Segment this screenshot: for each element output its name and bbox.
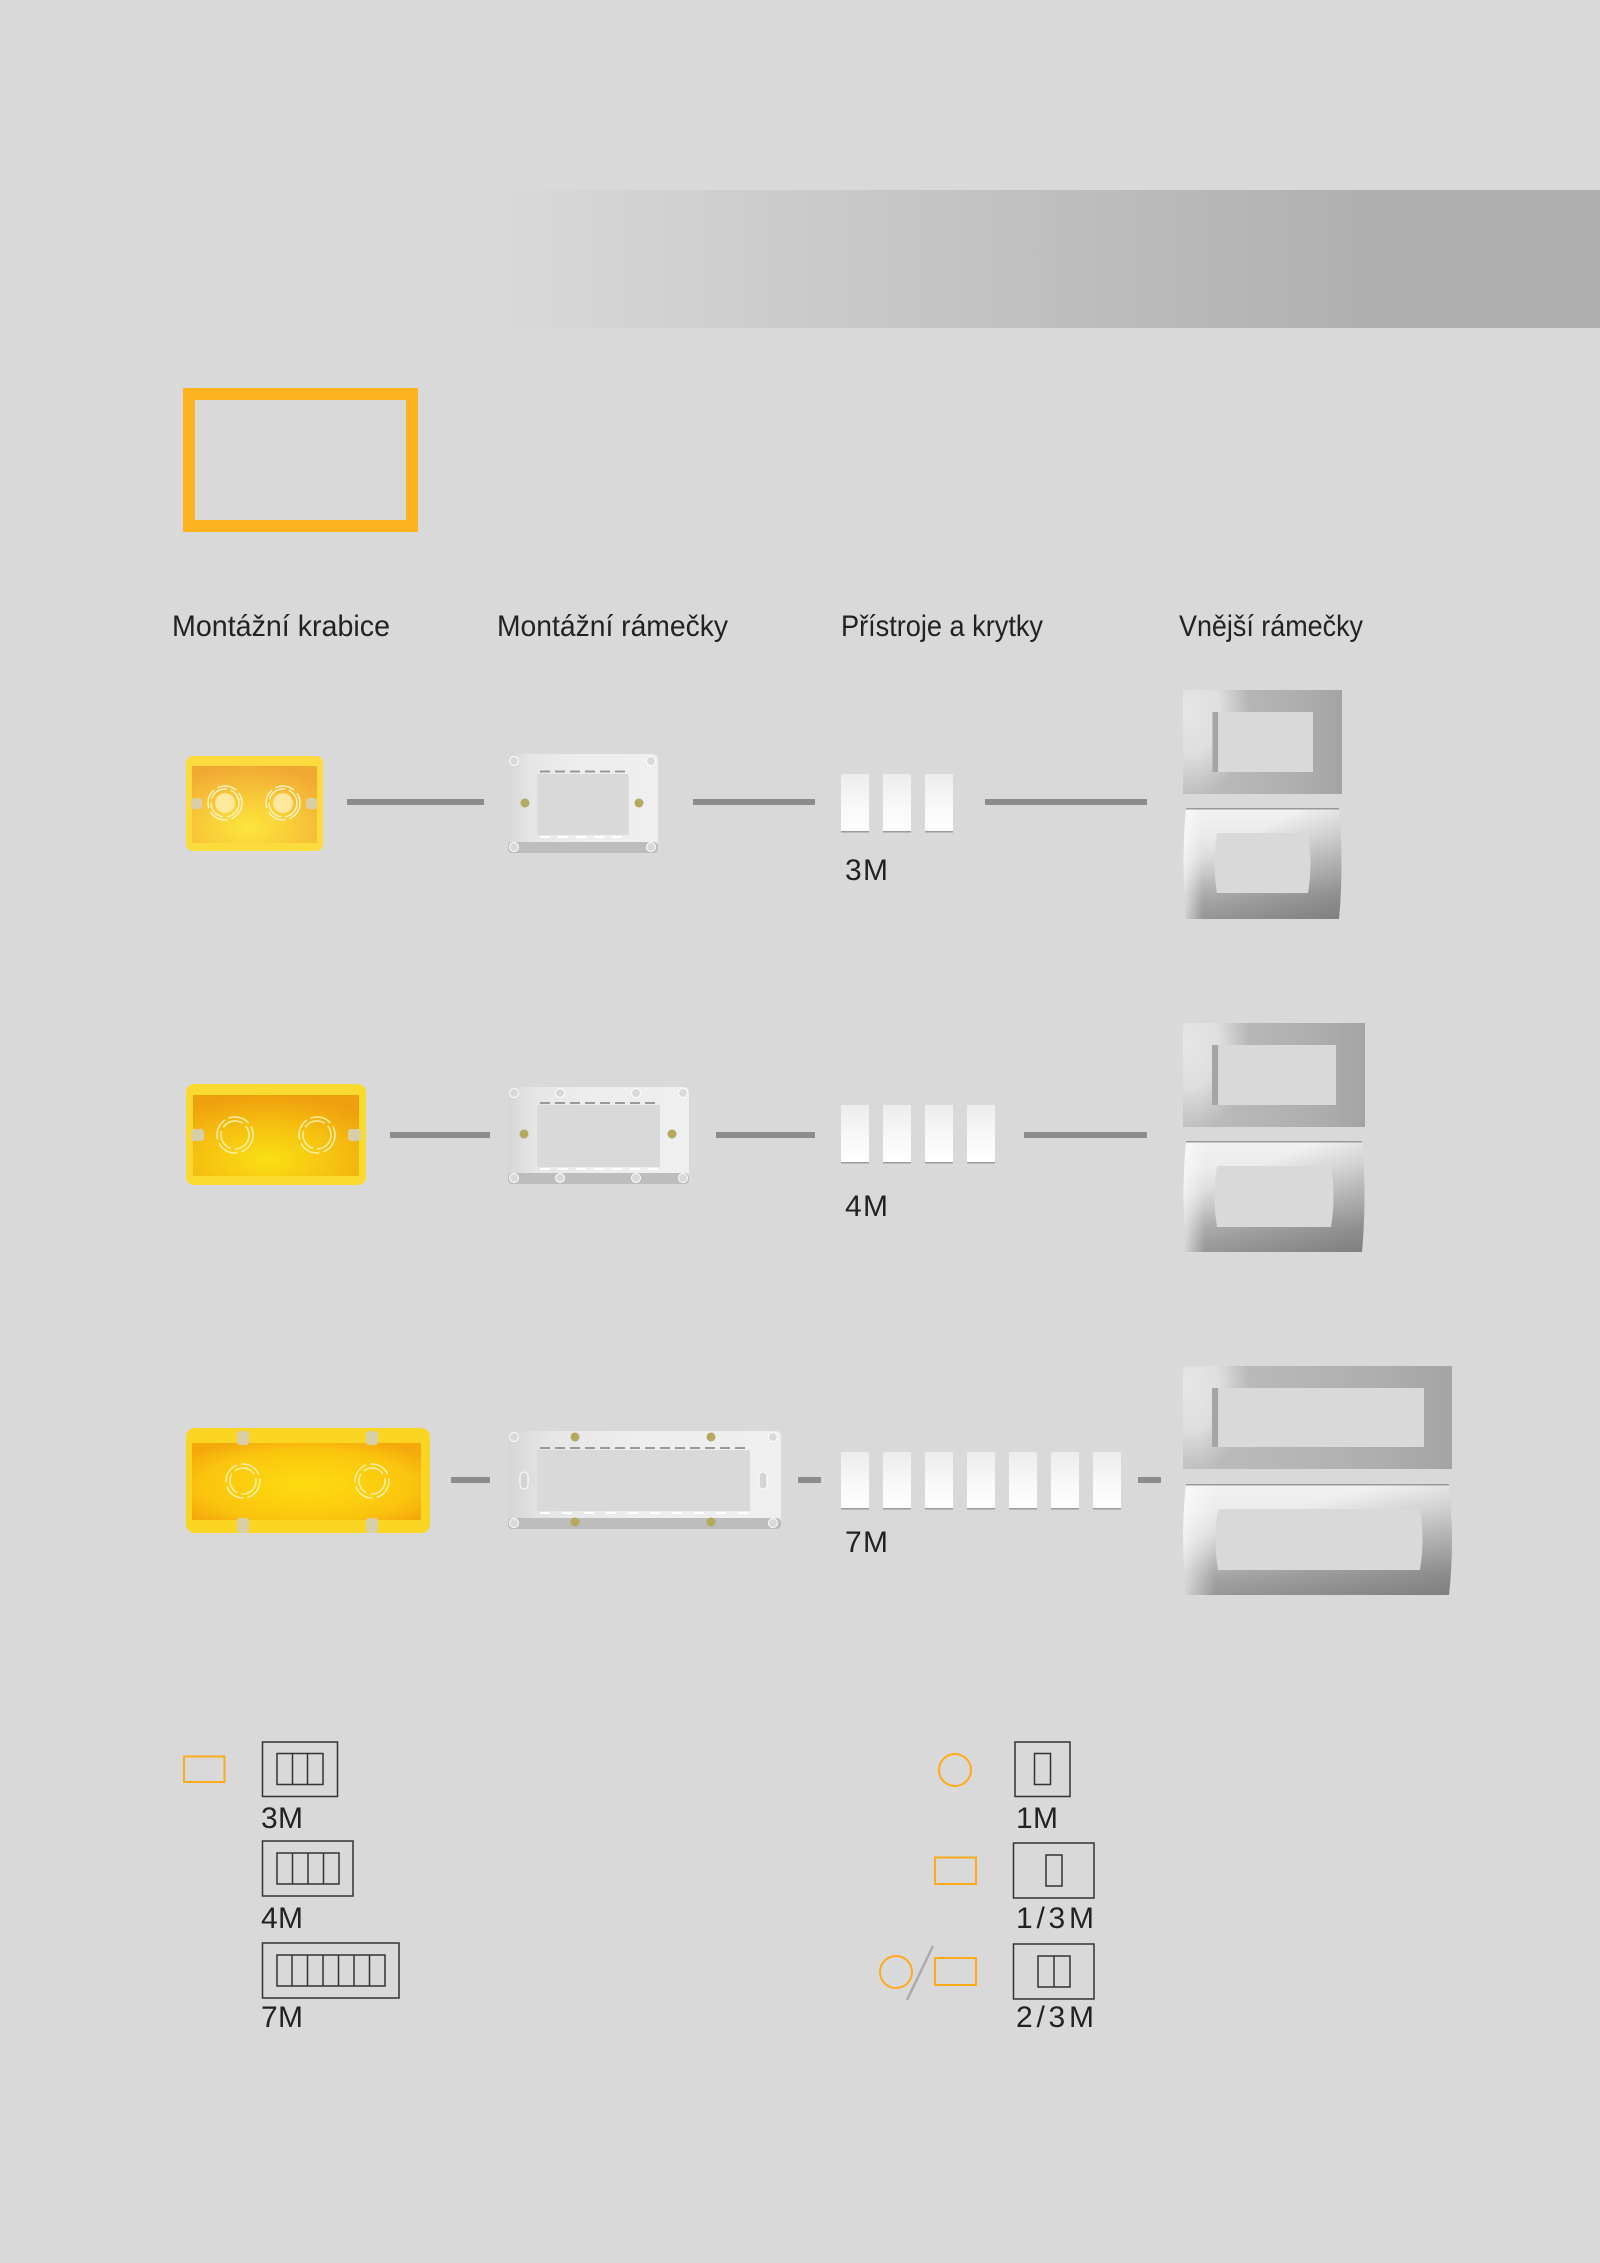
connector line	[1138, 1477, 1161, 1483]
modules 4M	[841, 1105, 995, 1164]
square cover plate 4M	[1183, 1023, 1365, 1127]
square cover plate 7M	[1183, 1366, 1452, 1469]
panel: 7M row	[186, 1366, 1452, 1595]
column headings	[172, 610, 1363, 643]
diagram 2/3M	[1014, 1944, 1094, 1999]
connector line	[798, 1477, 821, 1483]
heading: Přístroje a krytky: Přístroje a krytky	[841, 610, 1043, 643]
label 3M: 3M	[845, 854, 888, 887]
label 4M: 4M	[261, 1902, 303, 1935]
yellow mounting box 7M	[186, 1428, 430, 1533]
curved cover plate 3M	[1184, 808, 1342, 919]
label 4M: 4M	[845, 1190, 888, 1223]
diagram 4M	[262, 1841, 353, 1896]
square cover plate 3M	[1183, 690, 1342, 794]
label 7M: 7M	[261, 2001, 303, 2034]
connector line	[693, 799, 815, 805]
legend: rectangular box formats	[184, 1742, 399, 2034]
orange title frame	[189, 394, 412, 526]
connector line	[1024, 1132, 1147, 1138]
modules 3M	[841, 774, 953, 832]
diagram 3M	[262, 1742, 338, 1796]
modules 7M	[841, 1452, 1121, 1510]
yellow mounting box 3M	[186, 756, 323, 851]
heading: Montážní rámečky: Montážní rámečky	[497, 610, 728, 643]
heading: Vnější rámečky: Vnější rámečky	[1179, 610, 1363, 643]
connector line	[985, 799, 1147, 805]
mounting frame 7M	[508, 1431, 781, 1529]
label 2/3M: 2/3M	[1016, 2001, 1094, 2034]
connector line	[451, 1477, 490, 1483]
yellow mounting box 4M	[186, 1084, 366, 1185]
curved cover plate 4M	[1184, 1141, 1364, 1252]
label 3M: 3M	[261, 1802, 303, 1835]
heading: Montážní krabice: Montážní krabice	[172, 610, 390, 643]
icon: orange rectangle	[184, 1756, 224, 1782]
panel: 3M row	[186, 690, 1342, 919]
header gradient band	[503, 190, 1600, 328]
connector line	[716, 1132, 815, 1138]
panel: 4M row	[186, 1023, 1365, 1252]
icon: orange circle	[939, 1754, 971, 1786]
label 1M: 1M	[1016, 1802, 1058, 1835]
diagram 1M	[1015, 1742, 1070, 1796]
label 1/3M: 1/3M	[1016, 1902, 1094, 1935]
diagram 7M	[262, 1943, 399, 1998]
connector line	[390, 1132, 490, 1138]
icon: orange circle or rectangle	[880, 1946, 976, 2000]
connector line	[347, 799, 484, 805]
label 7M: 7M	[845, 1526, 888, 1559]
icon: orange rectangle	[935, 1858, 976, 1884]
curved cover plate 7M	[1183, 1484, 1452, 1595]
mounting frame 4M	[508, 1087, 689, 1184]
mounting frame 3M	[508, 754, 658, 853]
diagram 1/3M	[1014, 1843, 1094, 1898]
legend: round and rectangular box formats	[880, 1742, 1094, 2034]
